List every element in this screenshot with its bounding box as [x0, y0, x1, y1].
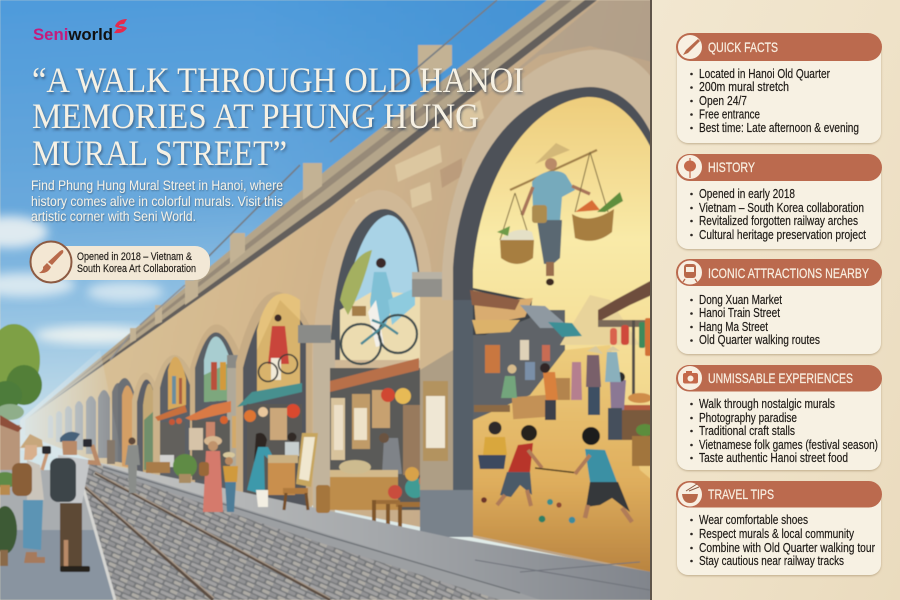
heading: iconic attractions: [676, 259, 882, 286]
list: attractions: [690, 293, 820, 347]
list: tips: Stay cautious near railway tracks: [699, 554, 844, 568]
sky with clouds: [0, 0, 660, 600]
callout: opened in 2018: Opened in 2018 – Vietnam &: [77, 251, 193, 263]
title: MURAL STREET”: [32, 133, 287, 173]
title: [32, 60, 524, 173]
panel: history: [676, 154, 882, 249]
list: experiences: [690, 397, 878, 465]
list: quick facts: [690, 67, 859, 135]
railway tracks: [85, 472, 330, 600]
heading: unmissable experiences: [676, 365, 882, 392]
list: attractions: Hang Ma Street: [699, 320, 768, 334]
heading: history: [676, 154, 882, 181]
panel: travel tips: [676, 481, 882, 575]
list: history: Cultural heritage preservation project: [699, 228, 866, 242]
illustration: railway viaduct mural street: [0, 0, 660, 600]
list: history: Revitalized forgotten railway arches: [699, 214, 858, 228]
tree and left building: [0, 324, 42, 566]
sidewalk and curb: [100, 463, 652, 600]
list: experiences: Walk through nostalgic murals: [699, 397, 835, 411]
panel: iconic attractions nearby: [676, 259, 882, 354]
viaduct wall: [25, 0, 652, 575]
intro text: Find Phung Hung Mural Street in Hanoi, where: [31, 178, 283, 193]
figures on sidewalk: woman in red, child, woman in ao dai: [199, 432, 330, 513]
distant small arches: [48, 378, 134, 468]
icon: bowl: [678, 482, 702, 507]
intro text: artistic corner with Seni World.: [31, 209, 196, 224]
arch 5: [153, 355, 196, 488]
heading: unmissable experiences: UNMISSABLE EXPERIENCES: [708, 370, 853, 386]
callout: opened in 2018: South Korea Art Collaboration: [77, 263, 196, 275]
list: quick facts: Free entrance: [699, 108, 760, 122]
mural: stalls and shoppers: [474, 280, 654, 466]
mural: lady in red with bicycle: [258, 314, 298, 382]
heading: quick facts: [676, 33, 882, 61]
arch 3 with red dress mural: [236, 292, 312, 510]
arch pillar between arches: [412, 272, 474, 537]
list: experiences: Photography paradise: [699, 411, 797, 425]
callout: opened in 2018: [30, 242, 210, 282]
list: tips: Wear comfortable shoes: [699, 513, 808, 527]
icon: camera: [678, 366, 702, 390]
sitting boy: [478, 422, 507, 469]
list: experiences: Taste authentic Hanoi street food: [699, 451, 848, 465]
title: “A WALK THROUGH OLD HANOI: [32, 60, 524, 100]
heading: travel tips: [676, 481, 882, 508]
list: quick facts: Open 24/7: [699, 94, 747, 108]
heading: travel tips: TRAVEL TIPS: [708, 486, 774, 502]
icon: lantern: [678, 154, 702, 180]
basket right: [572, 209, 614, 241]
mural: market street background: [470, 288, 652, 572]
arch 6: [132, 373, 160, 478]
title: MEMORIES AT PHUNG HUNG: [32, 96, 479, 136]
intro text: [31, 178, 283, 224]
panel: quick facts: [676, 33, 882, 143]
mural: vendor with shoulder pole: [497, 143, 623, 286]
mural: girl on bicycle: [341, 258, 417, 364]
list: quick facts: 200m mural stretch: [699, 80, 789, 94]
list: attractions: Dong Xuan Market: [699, 293, 782, 307]
panel: unmissable experiences: [676, 365, 882, 470]
man with cap and backpack: [50, 432, 98, 572]
distant pedestrians: [107, 437, 197, 493]
icon: train: [678, 260, 702, 285]
ground: cobbled track bed: [0, 460, 540, 600]
calligraphy easel: [296, 433, 318, 487]
icon: paintbrush: [678, 34, 702, 60]
arch 4 with mural of children: [185, 324, 257, 500]
woman with hat: [12, 434, 51, 563]
arch 2 with bicycle mural: [298, 190, 432, 530]
heading: history: HISTORY: [708, 159, 755, 175]
basket left: [500, 240, 534, 264]
boy in red: [497, 425, 542, 506]
list: history: Vietnam – South Korea collaboration: [699, 201, 864, 215]
list: quick facts: Located in Hanoi Old Quarter: [699, 67, 830, 81]
heading: quick facts: QUICK FACTS: [708, 39, 778, 55]
list: history: Opened in early 2018: [699, 187, 795, 201]
list: attractions: Hanoi Train Street: [699, 306, 780, 320]
list: tips: [690, 513, 875, 568]
child: [223, 452, 238, 512]
intro text: history comes alive in colorful murals. Visit this: [31, 194, 283, 209]
list: quick facts: Best time: Late afternoon & evening: [699, 121, 859, 135]
icon: paintbrush: [30, 242, 72, 282]
list: history: [690, 187, 866, 242]
list: tips: Respect murals & local community: [699, 527, 855, 541]
icon: logo swoosh: [114, 19, 127, 33]
seller and stool: [268, 432, 308, 510]
list: attractions: Old Quarter walking routes: [699, 333, 820, 347]
woman in red: [199, 436, 223, 512]
logo: Seniworld: Seniworld: [33, 26, 113, 44]
far haze over distant arches: [20, 350, 125, 470]
woman in ao dai: [247, 433, 280, 507]
parchment side panel: [650, 0, 900, 600]
list: experiences: Traditional craft stalls: [699, 424, 795, 438]
boy in blue: [575, 427, 632, 522]
tourists photographing: [12, 432, 98, 572]
logo: Seniworld: [33, 19, 127, 44]
mural: children playing with stick and marbles: [478, 422, 632, 523]
big arch mural: [470, 97, 654, 572]
market stall under arch 2: [330, 358, 440, 537]
big arch ring: [442, 50, 652, 300]
